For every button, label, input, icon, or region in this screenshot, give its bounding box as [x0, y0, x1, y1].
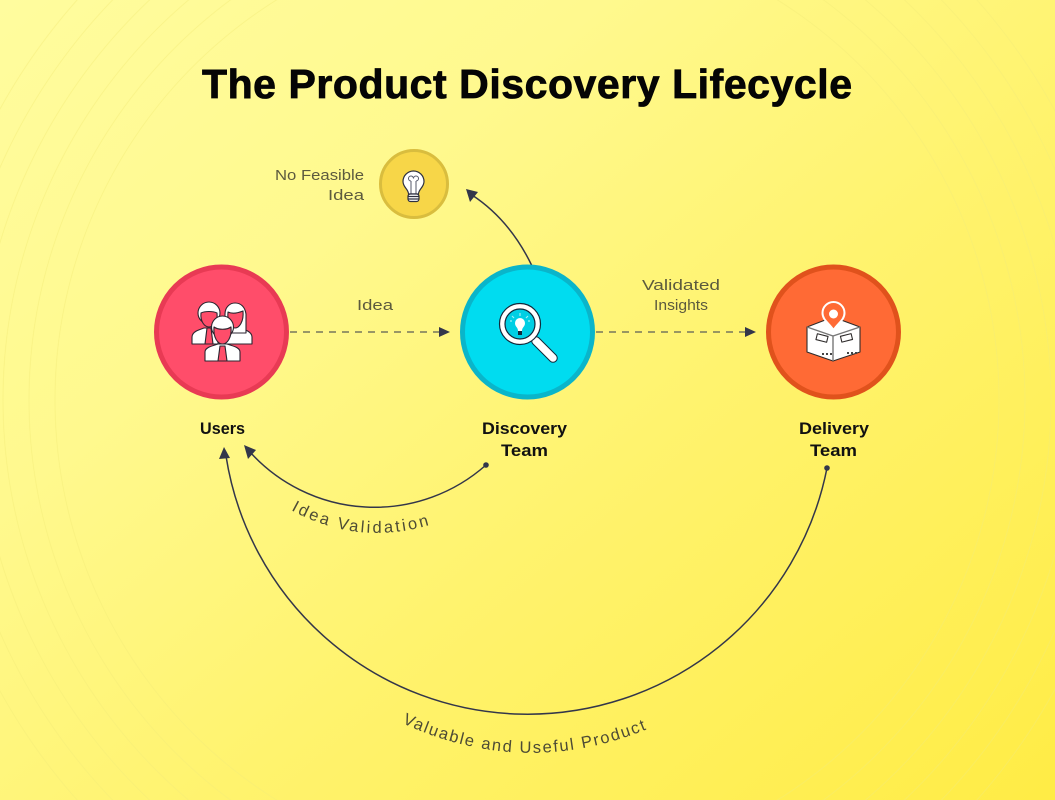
- label: no feasible idea: [275, 167, 365, 204]
- label: validated insights: [642, 277, 720, 314]
- label: discovery team: Team: [501, 442, 548, 460]
- label: delivery team: Delivery: [799, 420, 870, 438]
- label: no feasible idea: No Feasible: [275, 167, 364, 184]
- icon: magnifier with bulb: [500, 304, 553, 358]
- label: validated insights: Validated: [642, 277, 720, 294]
- node: users: [156, 267, 286, 397]
- label: delivery team: Team: [810, 442, 857, 460]
- label: discovery team: Discovery: [482, 420, 568, 438]
- label: discovery team: [482, 420, 568, 460]
- node: discovery team: [462, 267, 592, 397]
- icon: light bulb: [403, 171, 424, 202]
- arrow: validated insights to delivery team: [596, 327, 756, 337]
- label: validated insights: Insights: [654, 297, 708, 314]
- title: The Product Discovery Lifecycle: [202, 61, 852, 107]
- curved label: idea validation: Idea Validation: [292, 500, 428, 533]
- node: delivery team: [768, 267, 898, 397]
- arrow: idea to discovery team: [290, 327, 450, 337]
- node: no feasible idea: [380, 150, 448, 218]
- curved label: valuable and useful product: Valuable and Useful Product: [406, 712, 646, 753]
- label: idea: Idea: [357, 297, 394, 314]
- label: no feasible idea: Idea: [328, 187, 365, 204]
- arrow: valuable and useful product: [219, 447, 830, 714]
- label: users: Users: [200, 420, 245, 438]
- arrow: idea validation: [244, 445, 489, 507]
- label: delivery team: [799, 420, 870, 460]
- arrow: discovery team to no feasible idea: [466, 189, 532, 266]
- icon: users group: [192, 302, 252, 361]
- icon: parcel with location pin: [807, 302, 860, 361]
